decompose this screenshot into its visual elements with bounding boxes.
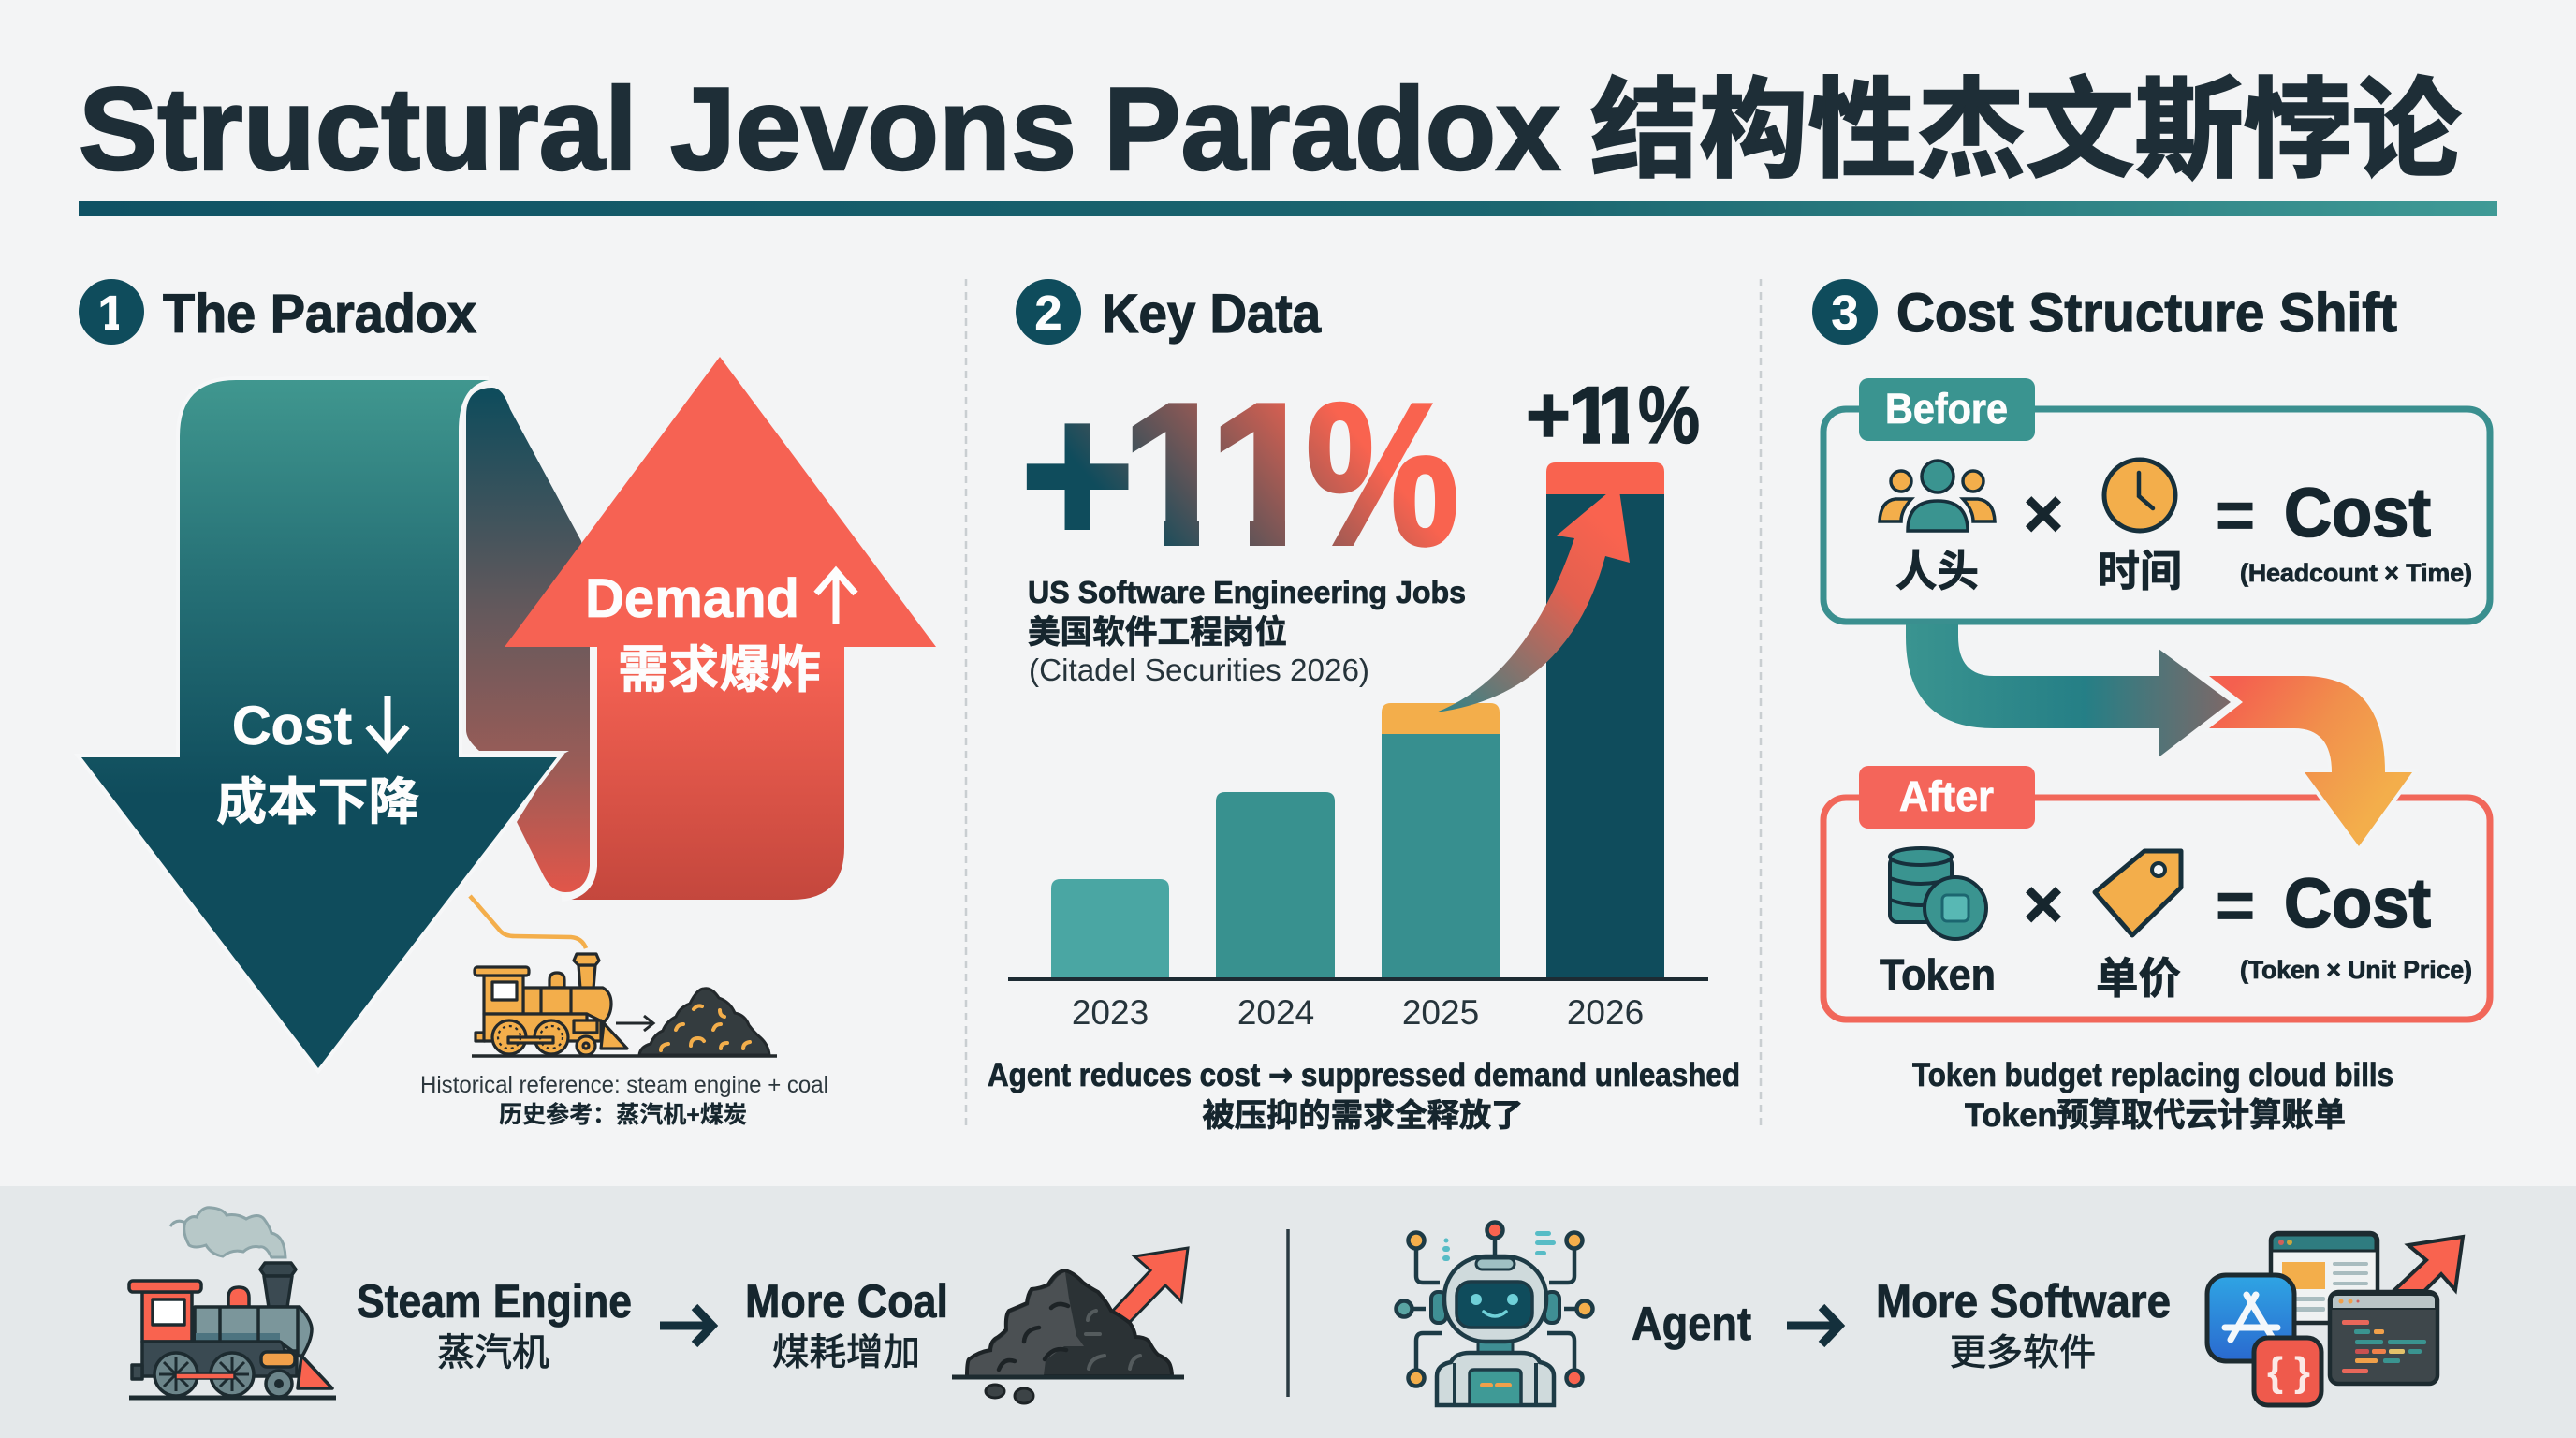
after box <box>1823 766 2490 1020</box>
before box: 时间 <box>2098 547 2182 595</box>
icon: headcount <box>1880 461 1995 531</box>
stat description <box>1028 575 1466 687</box>
title <box>79 65 2461 195</box>
after box: × <box>2023 865 2064 943</box>
title: Paradox <box>1104 65 1560 195</box>
bar label +11%: + <box>1526 371 1571 461</box>
caption: key data: 被压抑的需求全释放了 <box>1202 1098 1524 1134</box>
bar label +11%: 1 <box>1568 371 1613 461</box>
arrow: agent to software <box>1787 1307 1839 1344</box>
arrow: before to after <box>1906 624 2412 846</box>
caption: historical reference <box>420 1072 828 1128</box>
bar chart: 2023 <box>1072 993 1149 1032</box>
after box: After <box>1899 772 1994 820</box>
title: 结构性杰文斯悖论 <box>1590 69 2461 191</box>
heading: the paradox: 1 <box>98 286 124 341</box>
bottom band background <box>0 1186 2576 1438</box>
caption: historical reference: Historical reference: steam engine + coal <box>420 1072 828 1098</box>
icon: clock <box>2104 460 2175 531</box>
big stat +11%: % <box>1306 360 1459 587</box>
label: agent: Agent <box>1632 1298 1751 1350</box>
bar chart <box>1008 462 1708 1032</box>
arrow: growth curve <box>1436 484 1630 712</box>
label: more software: 更多软件 <box>1950 1333 2096 1373</box>
label: steam engine <box>357 1275 632 1373</box>
caption: cost structure <box>1912 1057 2393 1134</box>
before box: Cost <box>2284 474 2431 551</box>
big stat +11%: 1 <box>1208 360 1321 587</box>
label: more coal: 煤耗增加 <box>772 1332 920 1373</box>
label: more software: More Software <box>1876 1275 2171 1328</box>
icon: price tag <box>2095 851 2181 935</box>
after box: (Token × Unit Price) <box>2240 956 2472 984</box>
panel: key data <box>988 279 1740 1134</box>
label: steam engine: 蒸汽机 <box>437 1332 549 1373</box>
icon: token coins <box>1890 848 1986 939</box>
ribbon fold connecting arrows <box>466 388 599 892</box>
heading: cost structure shift: 3 <box>1832 286 1858 341</box>
caption: historical reference: 历史参考：蒸汽机+煤炭 <box>499 1101 747 1128</box>
big stat +11%: + <box>1020 360 1134 587</box>
bar label +11%: 1 <box>1597 371 1642 461</box>
panel: the paradox <box>79 279 936 1128</box>
after box: Token <box>1880 950 1996 999</box>
bar chart: 2026 <box>1567 993 1644 1032</box>
after box: = <box>2216 869 2255 944</box>
icon: steam locomotive <box>129 1208 336 1398</box>
caption: cost structure: Token预算取代云计算账单 <box>1965 1097 2346 1134</box>
stat description: 美国软件工程岗位 <box>1028 615 1287 651</box>
arrow: demand up: 需求爆炸 <box>618 642 821 698</box>
big stat +11% <box>1026 401 1456 548</box>
heading: cost structure shift: Cost Structure Shift <box>1896 283 2397 344</box>
stat description: (Citadel Securities 2026) <box>1029 653 1369 687</box>
arrow: cost down <box>81 380 557 1068</box>
bar label +11%: % <box>1638 371 1700 461</box>
bar label +11% <box>1528 386 1699 444</box>
arrow: demand up: Demand <box>585 568 799 629</box>
caption: key data <box>988 1057 1740 1134</box>
icon: small orange steam engine with coal <box>470 896 777 1056</box>
panel: historical analogy strip <box>129 1208 2463 1405</box>
icon: robot agent <box>1397 1223 1593 1405</box>
icon: software windows and apps <box>2207 1233 2463 1405</box>
arrow: demand up <box>505 357 936 900</box>
arrow: cost down: 成本下降 <box>216 774 419 830</box>
caption: key data: Agent reduces cost → suppressed demand unleashed <box>988 1057 1740 1094</box>
heading: key data <box>1016 279 1322 345</box>
icon: coal pile with arrow <box>952 1248 1188 1403</box>
icon: software windows and apps: { } <box>2267 1349 2310 1395</box>
after box: 单价 <box>2096 954 2181 1003</box>
after box: Cost <box>2284 864 2431 942</box>
heading: key data: 2 <box>1035 286 1061 341</box>
label: steam engine: Steam Engine <box>357 1275 632 1328</box>
title: Structural <box>79 65 637 195</box>
before box: Before <box>1885 385 2008 433</box>
heading: key data: Key Data <box>1102 284 1322 345</box>
bar chart: 2024 <box>1237 993 1314 1032</box>
title: Jevons <box>670 65 1076 195</box>
heading: the paradox: The Paradox <box>163 284 476 345</box>
arrow: steam to coal <box>660 1307 712 1344</box>
before box: × <box>2023 475 2064 552</box>
before box: = <box>2216 478 2255 553</box>
big stat +11%: 1 <box>1120 360 1233 587</box>
before box: (Headcount × Time) <box>2240 559 2472 587</box>
panel: cost structure shift <box>1812 279 2490 1134</box>
bar chart: 2025 <box>1402 993 1479 1032</box>
before box <box>1823 378 2490 622</box>
arrow: cost down: Cost <box>232 696 352 756</box>
label: more coal <box>745 1275 948 1373</box>
label: more coal: More Coal <box>745 1275 948 1328</box>
before box: 人头 <box>1895 547 1979 595</box>
caption: cost structure: Token budget replacing cloud bills <box>1912 1057 2393 1093</box>
stat description: US Software Engineering Jobs <box>1028 575 1466 609</box>
label: more software <box>1876 1275 2171 1373</box>
